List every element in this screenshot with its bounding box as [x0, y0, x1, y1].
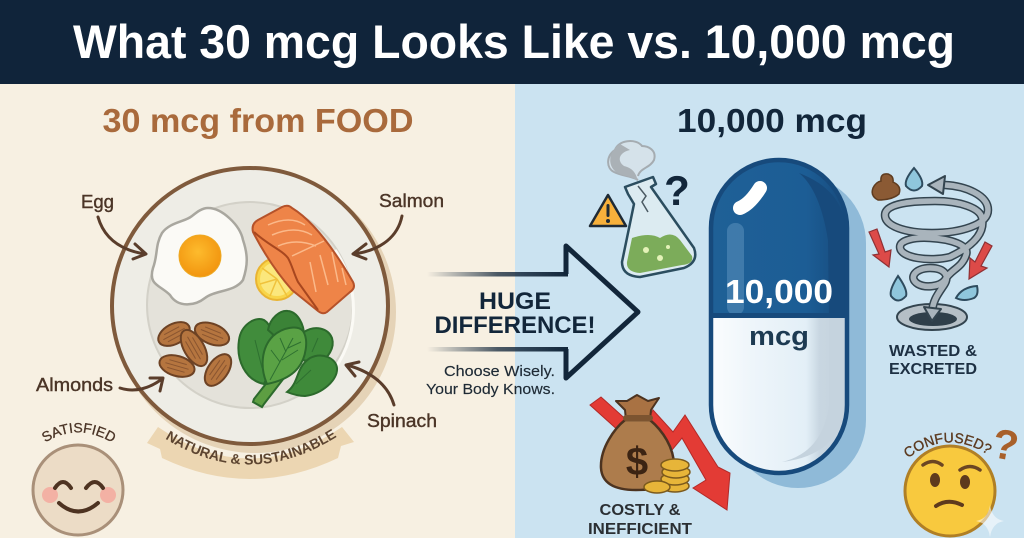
icon: fried egg — [152, 208, 247, 304]
ribbon: natural and sustainable: NATURAL & SUSTAINABLE — [166, 428, 336, 465]
icon: water drop left — [891, 276, 906, 300]
label: Egg: Egg — [81, 192, 114, 212]
panel: supplement background — [515, 84, 1024, 538]
icon: red falling arrow — [590, 397, 730, 510]
label: Egg — [81, 192, 146, 259]
icon: brown question mark: ? — [989, 419, 1022, 470]
plate — [112, 168, 396, 453]
icon: salmon — [253, 206, 354, 313]
icon: lemon slice — [256, 258, 298, 300]
tagline — [426, 364, 555, 398]
satisfied face — [32, 422, 124, 536]
icon: gold coins — [644, 459, 690, 493]
arrow text line two: DIFFERENCE! — [434, 312, 596, 339]
arrow text: huge difference: HUGE — [479, 288, 551, 315]
icon: red arrow right — [969, 242, 992, 279]
label: wasted and excreted — [889, 343, 977, 378]
heading: 10,000 mcg: 10,000 mcg — [677, 102, 867, 139]
arrow: huge difference — [427, 246, 638, 378]
capsule: 10,000 — [725, 273, 833, 310]
tagline: Choose Wisely. — [444, 364, 555, 380]
label: costly and inefficient: COSTLY & — [600, 502, 680, 519]
tagline: Your Body Knows. — [426, 382, 555, 398]
icon: question mark: ? — [664, 167, 690, 214]
title bar: What 30 mcg Looks Like vs. 10,000 mcg — [73, 15, 955, 68]
label: wasted and excreted: EXCRETED — [889, 361, 977, 378]
label: costly and inefficient: INEFFICIENT — [588, 521, 693, 538]
heading: 30 mcg from food: 30 mcg from FOOD — [102, 102, 414, 139]
icon: smoke — [608, 141, 655, 182]
label: Almonds: Almonds — [36, 375, 113, 395]
icon: water drop top — [906, 168, 922, 190]
confused face: CONFUSED? — [904, 432, 992, 456]
icon: money bag — [601, 395, 674, 490]
panel: food background — [0, 84, 515, 538]
icon: spinach — [238, 311, 337, 407]
label: Salmon: Salmon — [379, 191, 444, 211]
icon: tornado drain — [885, 176, 988, 330]
satisfied face: SATISFIED — [42, 422, 116, 442]
icon: flask — [622, 177, 695, 277]
icon: almonds — [154, 317, 237, 390]
title bar — [0, 0, 1024, 84]
label: Spinach — [346, 362, 437, 431]
capsule: mcg — [749, 321, 809, 351]
label: Salmon — [353, 191, 444, 259]
ribbon: natural and sustainable — [147, 427, 354, 479]
label: wasted and excreted: WASTED & — [889, 343, 977, 360]
icon: warning triangle — [590, 195, 626, 226]
icon: money bag: $ — [626, 440, 648, 484]
capsule — [711, 160, 866, 488]
icon: water drop right — [956, 286, 978, 300]
label: costly and inefficient — [588, 502, 693, 538]
label: Almonds — [36, 375, 163, 395]
label: Spinach: Spinach — [367, 411, 437, 431]
icon: red arrow left — [869, 229, 891, 267]
confused face — [904, 432, 1004, 538]
icon: poop — [872, 174, 900, 200]
